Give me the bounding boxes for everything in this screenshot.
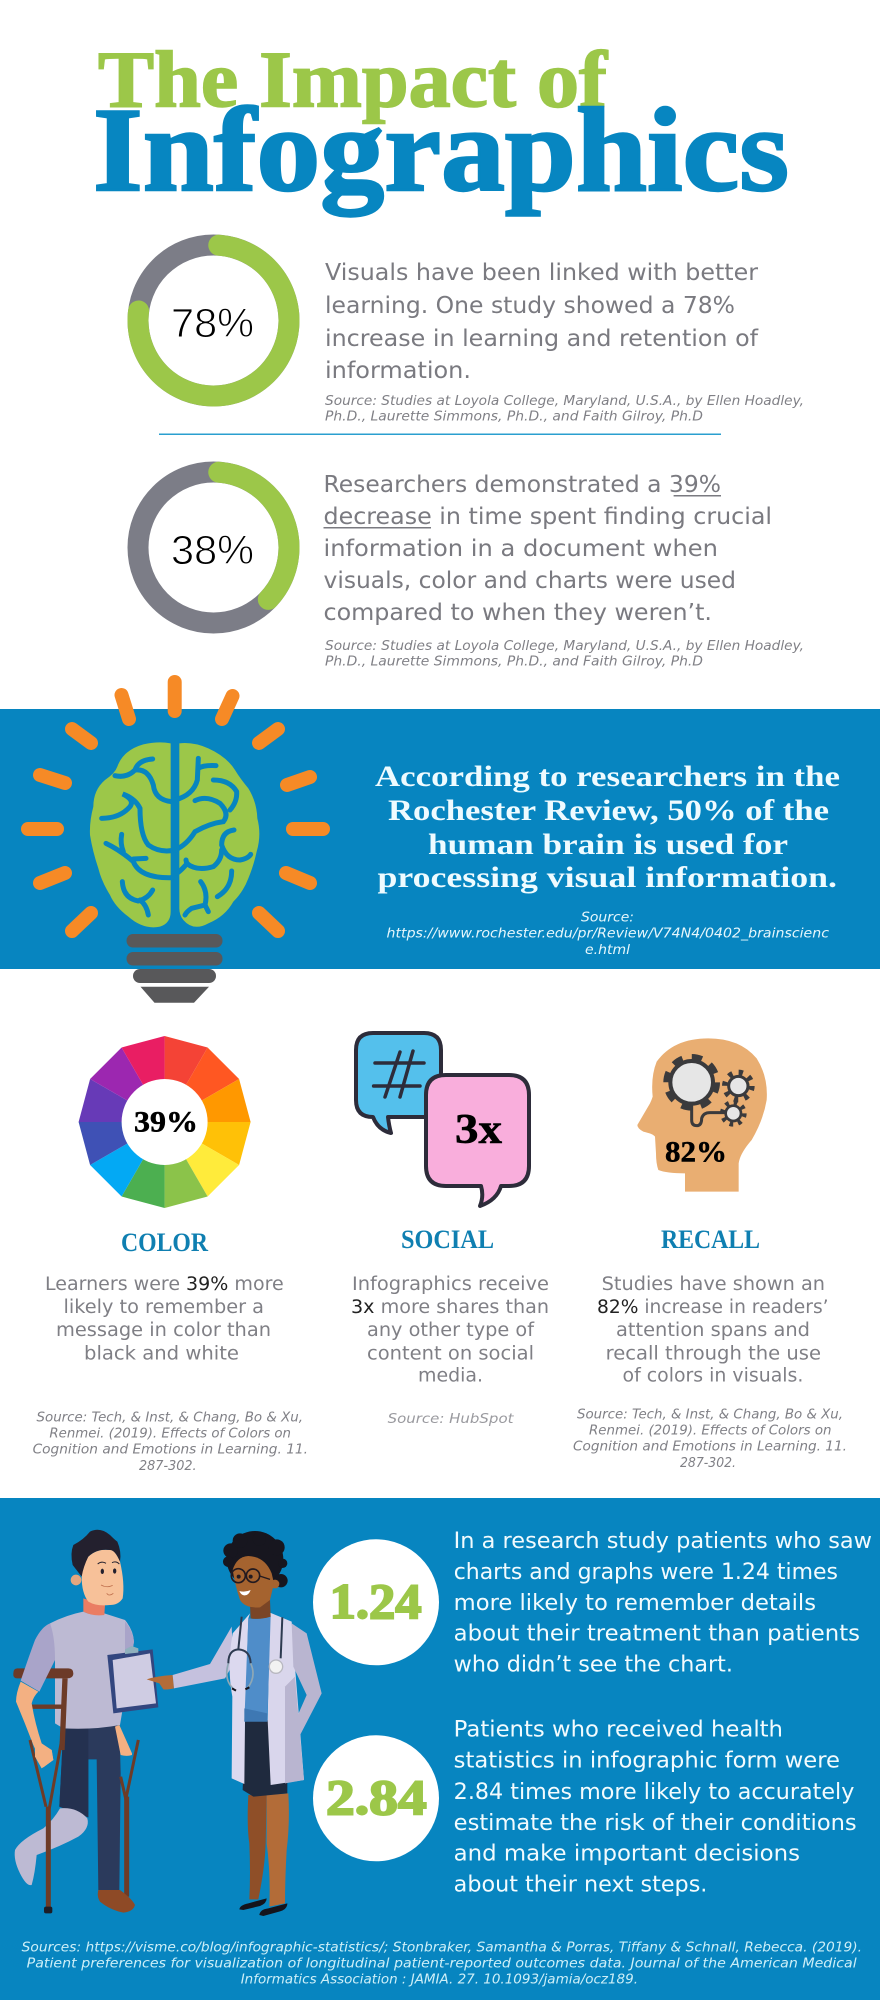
- text block: recall: of colors in visuals.: [622, 1366, 803, 1387]
- text block: recall: Studies have shown an: [602, 1274, 825, 1295]
- source: color: 287-302.: [139, 1458, 197, 1474]
- title: The Impact of: [98, 36, 608, 124]
- icon: brain light bulb: [28, 682, 323, 1003]
- stat circle: 1.24: 1.24: [330, 1573, 422, 1629]
- source: recall: Renmei. (2019). Effects of Colors on: [589, 1423, 832, 1439]
- source: Loyola study: Source: Studies at Loyola College, Maryland, U.S.A., by Ellen Hoadley,: [325, 393, 804, 409]
- text block: 2.84 times finding: estimate the risk of their conditions: [454, 1811, 857, 1836]
- text block: 1.24 times finding: who didn’t see the chart.: [454, 1653, 733, 1678]
- source: recall: Cognition and Emotions in Learning. 11.: [573, 1439, 847, 1455]
- callout: Rochester Review statement: [375, 760, 840, 894]
- text block: color: Learners were 39% more: [45, 1274, 284, 1295]
- title: [93, 36, 789, 217]
- heading: color: COLOR: [121, 1228, 208, 1257]
- text block: 1.24 times finding: charts and graphs were 1.24 times: [454, 1560, 838, 1585]
- panel: color column: [33, 1228, 308, 1474]
- text block: 2.84 times finding: [454, 1718, 857, 1898]
- text block: recall: recall through the use: [606, 1343, 821, 1364]
- source: Rochester: https://www.rochester.edu/pr/Review/V74N4/0402_brainscienc: [386, 926, 830, 942]
- text block: social: [351, 1274, 549, 1387]
- text block: social: Infographics receive: [352, 1274, 549, 1295]
- source: Loyola study: [325, 393, 804, 424]
- icon: head with gears and 82%: 82%: [665, 1136, 727, 1169]
- source: recall: Source: Tech, & Inst, & Chang, Bo & Xu,: [577, 1407, 843, 1423]
- text block: 39% decrease: decrease in time spent finding crucial: [324, 504, 772, 530]
- text block: 39% decrease: compared to when they weren’t.: [324, 600, 712, 626]
- text block: 2.84 times finding: 2.84 times more likely to accurately: [454, 1780, 854, 1805]
- callout: Rochester Review statement: processing visual information.: [378, 861, 837, 894]
- icon: speech bubbles with 3x: 3x: [455, 1107, 502, 1153]
- icon: colour wheel with 39%: [79, 1036, 251, 1208]
- source: color: Source: Tech, & Inst, & Chang, Bo & Xu,: [36, 1410, 303, 1426]
- text block: better learning: increase in learning and retention of: [325, 326, 759, 352]
- source: Loyola study repeat: [325, 638, 804, 670]
- text block: better learning: Visuals have been linked with better: [325, 260, 759, 286]
- text block: recall: attention spans and: [616, 1320, 810, 1341]
- sources footer: [22, 1940, 862, 1988]
- text block: social: 3x more shares than: [351, 1297, 549, 1318]
- source: color: [33, 1410, 308, 1474]
- text block: better learning: [325, 260, 759, 384]
- donut chart: 78%: 78%: [171, 300, 254, 346]
- callout: Rochester Review statement: human brain is used for: [428, 828, 788, 861]
- illustration: doctor: [147, 1531, 322, 1916]
- text block: 1.24 times finding: In a research study patients who saw: [454, 1529, 872, 1554]
- heading: recall: RECALL: [661, 1225, 760, 1254]
- source: Rochester: [386, 910, 830, 958]
- text block: better learning: learning. One study showed a 78%: [325, 293, 735, 319]
- donut chart: 78%: [133, 240, 294, 401]
- text block: recall: 82% increase in readers’: [597, 1297, 829, 1318]
- source: Rochester: e.html: [585, 942, 630, 958]
- callout: Rochester Review statement: Rochester Review, 50% of the: [388, 794, 829, 827]
- stat circle: 1.24: [313, 1539, 439, 1665]
- source: Loyola study repeat: Ph.D., Laurette Simmons, Ph.D., and Faith Gilroy, Ph.D: [325, 654, 703, 670]
- text block: color: [45, 1274, 284, 1364]
- text block: 2.84 times finding: about their next steps.: [454, 1873, 707, 1898]
- text block: 1.24 times finding: about their treatment than patients: [454, 1622, 860, 1647]
- stat circle: 2.84: 2.84: [326, 1769, 427, 1825]
- sources footer: Sources: https://visme.co/blog/infographic-statistics/; Stonbraker, Samantha & Porras, Tiffany & Schnall, Rebecca. (2019).: [22, 1940, 862, 1956]
- text block: color: message in color than: [56, 1320, 271, 1341]
- stat circle: 2.84: [313, 1735, 439, 1861]
- text block: 39% decrease: visuals, color and charts were used: [324, 568, 736, 594]
- panel: brain band: [0, 709, 880, 969]
- text block: 2.84 times finding: statistics in infographic form were: [454, 1749, 840, 1774]
- panel: recall column: [573, 1225, 847, 1471]
- text block: 2.84 times finding: Patients who received health: [454, 1718, 783, 1743]
- text block: social: media.: [418, 1366, 483, 1387]
- text block: 2.84 times finding: and make important decisions: [454, 1842, 800, 1867]
- heading: social: SOCIAL: [401, 1225, 494, 1254]
- donut chart: 38%: [133, 467, 294, 628]
- text block: social: content on social: [367, 1343, 534, 1364]
- text block: 1.24 times finding: [454, 1529, 872, 1678]
- source: recall: [573, 1407, 847, 1471]
- source: social: Source: HubSpot: [388, 1411, 514, 1427]
- text block: 1.24 times finding: more likely to remember details: [454, 1591, 816, 1616]
- text block: recall: [597, 1274, 829, 1387]
- text block: social: any other type of: [367, 1320, 534, 1341]
- panel: social column: [351, 1225, 549, 1427]
- sources footer: Patient preferences for visualization of longitudinal patient-reported outcomes data. Journal of the American Medical: [27, 1956, 857, 1972]
- sources footer: Informatics Association : JAMIA. 27. 10.1093/jamia/ocz189.: [241, 1972, 638, 1988]
- illustration: patient on crutches: [13, 1530, 158, 1913]
- source: Loyola study repeat: Source: Studies at Loyola College, Maryland, U.S.A., by Ellen Hoadley,: [325, 638, 804, 654]
- icon: head with gears and 82%: [637, 1038, 767, 1192]
- source: Loyola study: Ph.D., Laurette Simmons, Ph.D., and Faith Gilroy, Ph.D: [325, 408, 703, 424]
- text block: 39% decrease: Researchers demonstrated a 39%: [324, 472, 721, 498]
- text block: better learning: information.: [325, 358, 471, 384]
- text block: 39% decrease: [324, 472, 772, 626]
- icon: colour wheel with 39%: 39%: [134, 1106, 198, 1139]
- text block: color: black and white: [84, 1343, 239, 1364]
- source: color: Cognition and Emotions in Learning. 11.: [33, 1442, 308, 1458]
- source: color: Renmei. (2019). Effects of Colors on: [49, 1426, 291, 1442]
- icon: speech bubbles with 3x: [356, 1033, 529, 1206]
- title: Infographics: [93, 83, 789, 217]
- panel: patient band: [0, 1498, 880, 2000]
- source: Rochester: Source:: [581, 910, 634, 926]
- text block: 39% decrease: information in a document when: [324, 536, 718, 562]
- text block: color: likely to remember a: [64, 1297, 264, 1318]
- donut chart: 38%: 38%: [171, 527, 254, 573]
- source: recall: 287-302.: [680, 1455, 736, 1471]
- callout: Rochester Review statement: According to researchers in the: [375, 760, 840, 793]
